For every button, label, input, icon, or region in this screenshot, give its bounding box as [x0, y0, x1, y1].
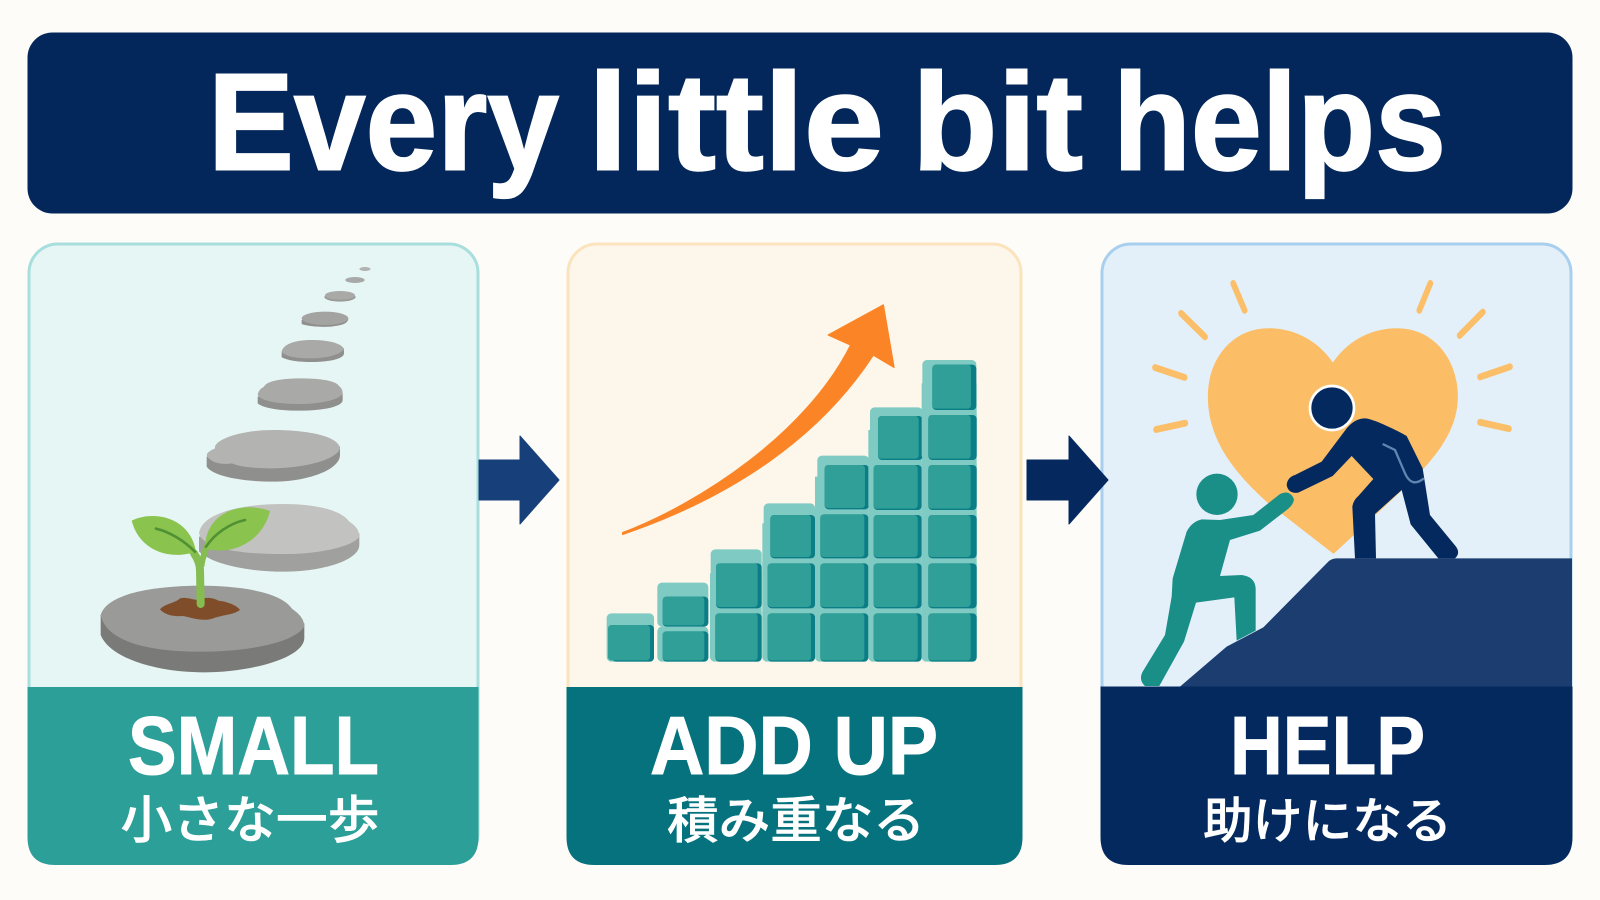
- title text: bit: [912, 46, 1083, 200]
- icon: heart: [1208, 328, 1458, 554]
- figure: helper: [1287, 386, 1458, 558]
- label: HELP: HELP: [1230, 699, 1425, 792]
- title text: Every: [208, 46, 559, 200]
- label: ADD UP: ADD UP: [650, 699, 938, 792]
- figure: climber: [1141, 474, 1294, 686]
- label band: help: [1100, 686, 1572, 865]
- illustration: stepping stones and sprout: [101, 267, 371, 672]
- arrow: small to add up: [479, 436, 559, 524]
- hill: [1180, 558, 1572, 687]
- title banner: [28, 32, 1572, 214]
- title text: helps: [1113, 46, 1446, 200]
- label: SMALL: SMALL: [128, 699, 379, 792]
- icon: light rays: [1155, 283, 1510, 430]
- panel: add up: [566, 244, 1022, 865]
- panel: small: [28, 244, 478, 865]
- icon: heart with rays: [1155, 283, 1510, 554]
- title text: little: [588, 46, 884, 200]
- label: Japanese adding up: 積み重なる: [667, 793, 925, 849]
- chart: stacked blocks: [607, 305, 977, 662]
- label: Japanese to help: 助けになる: [1203, 795, 1452, 849]
- title text: [208, 46, 1446, 200]
- label band: add up: [566, 687, 1022, 865]
- illustration: helper and climber on hill: [1141, 386, 1572, 687]
- label: Japanese small step: 小さな一歩: [120, 792, 380, 849]
- arrow: growth trend: [623, 305, 894, 534]
- arrow: add up to help: [1027, 436, 1108, 524]
- label band: small: [28, 687, 478, 865]
- panel: help: [1100, 244, 1572, 865]
